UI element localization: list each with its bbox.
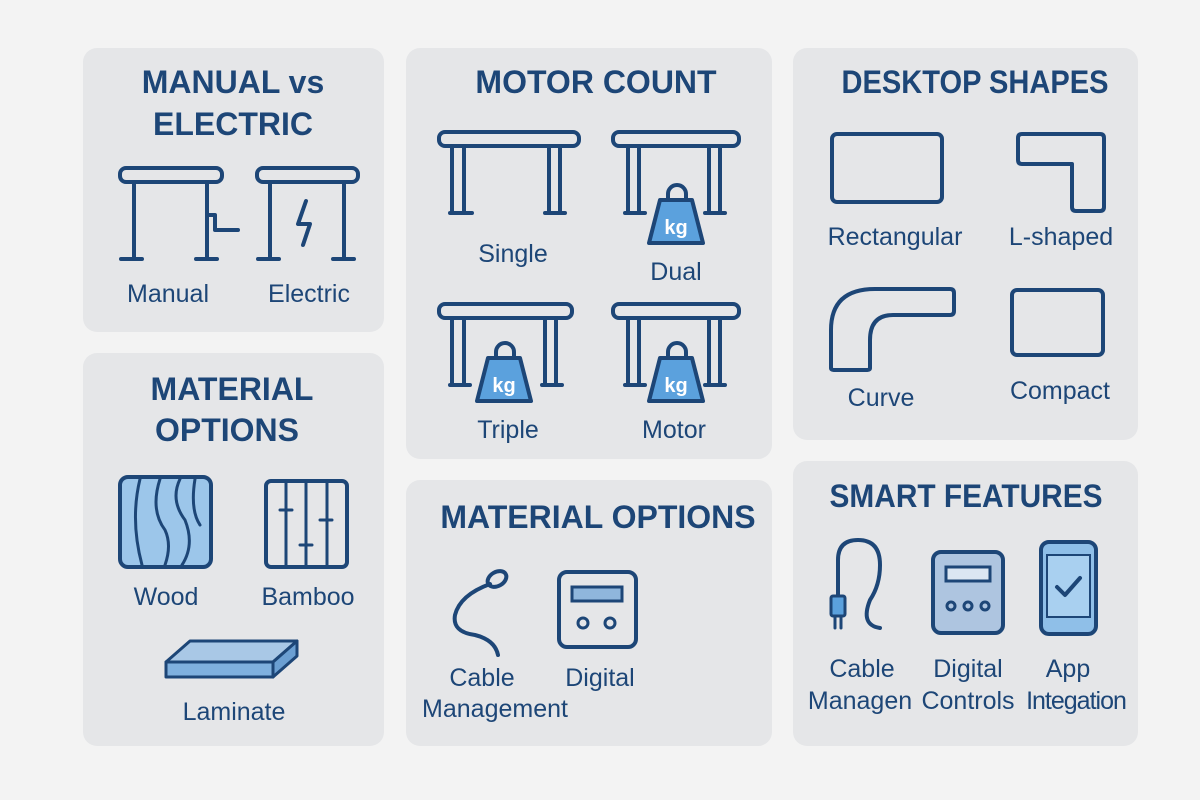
label: compact: Compact (1010, 377, 1110, 405)
label: cable management: Cable (829, 655, 895, 683)
label: single: Single (478, 240, 548, 268)
label: app integration (1026, 655, 1126, 715)
icon: wood (120, 477, 211, 567)
label: curve: Curve (848, 384, 914, 412)
heading: manual vs electric (142, 64, 324, 142)
label: L-shaped: L-shaped (1009, 223, 1113, 251)
label: app integration: App (1046, 655, 1090, 683)
icon: curve (831, 289, 954, 370)
label: dual: Dual (650, 258, 702, 286)
panel: material options middle (406, 480, 772, 746)
label: cable management: Managen (808, 687, 912, 715)
icon: single desk (439, 132, 579, 213)
label: laminate: Laminate (183, 698, 285, 726)
icon: digital control (559, 572, 636, 647)
label: bamboo: Bamboo (261, 583, 355, 611)
label: cable management (808, 655, 912, 715)
label: triple: Triple (477, 416, 539, 444)
heading: motor count: MOTOR COUNT (475, 64, 717, 100)
label: cable management: Management (422, 695, 568, 723)
icon: cable plug (831, 540, 880, 628)
icon: motor desk with weight (613, 304, 739, 401)
label: manual: Manual (127, 280, 209, 308)
icon: bamboo (266, 481, 347, 567)
icon: triple desk with weight (439, 304, 572, 401)
label: electric: Electric (268, 280, 350, 308)
label: cable management (422, 664, 568, 723)
icon: dual desk with weight: kg (664, 217, 688, 239)
label: cable management: Cable (449, 664, 515, 692)
icon: manual desk (120, 168, 238, 259)
label: rectangular: Rectangular (828, 223, 962, 251)
heading: material options: MATERIAL OPTIONS (440, 499, 756, 535)
panel: motor count (406, 48, 772, 459)
icon: electric desk (257, 168, 358, 259)
heading: smart features: SMART FEATURES (830, 478, 1102, 514)
icon: digital controls (933, 552, 1003, 633)
label: digital controls: Digital (933, 655, 1003, 683)
panel: material options left (83, 353, 384, 746)
heading: material options: OPTIONS (155, 412, 299, 448)
panel: manual vs electric (83, 48, 384, 332)
heading: material options: MATERIAL (151, 371, 313, 407)
heading: desktop shapes: DESKTOP SHAPES (842, 64, 1108, 100)
icon: laminate slab (166, 641, 297, 677)
label: wood: Wood (134, 583, 198, 611)
panel: desktop shapes (793, 48, 1138, 440)
icon: phone app (1041, 542, 1096, 634)
icon: dual desk with weight (613, 132, 739, 243)
label: app integration: Integation (1026, 687, 1126, 715)
heading: manual vs electric: ELECTRIC (153, 106, 313, 142)
icon: L-shaped (1018, 134, 1104, 211)
heading: manual vs electric: MANUAL vs (142, 64, 324, 100)
icon: triple desk with weight: kg (492, 375, 516, 397)
label: digital controls: Controls (921, 687, 1015, 715)
label: digital controls (921, 655, 1015, 715)
icon: compact (1012, 290, 1103, 355)
icon: rectangular (832, 134, 942, 202)
icon: motor desk with weight: kg (664, 375, 688, 397)
label: motor: Motor (642, 416, 706, 444)
icon: cable (455, 568, 509, 655)
panel: smart features (793, 461, 1138, 746)
label: digital: Digital (565, 664, 635, 692)
heading: material options (151, 371, 313, 448)
